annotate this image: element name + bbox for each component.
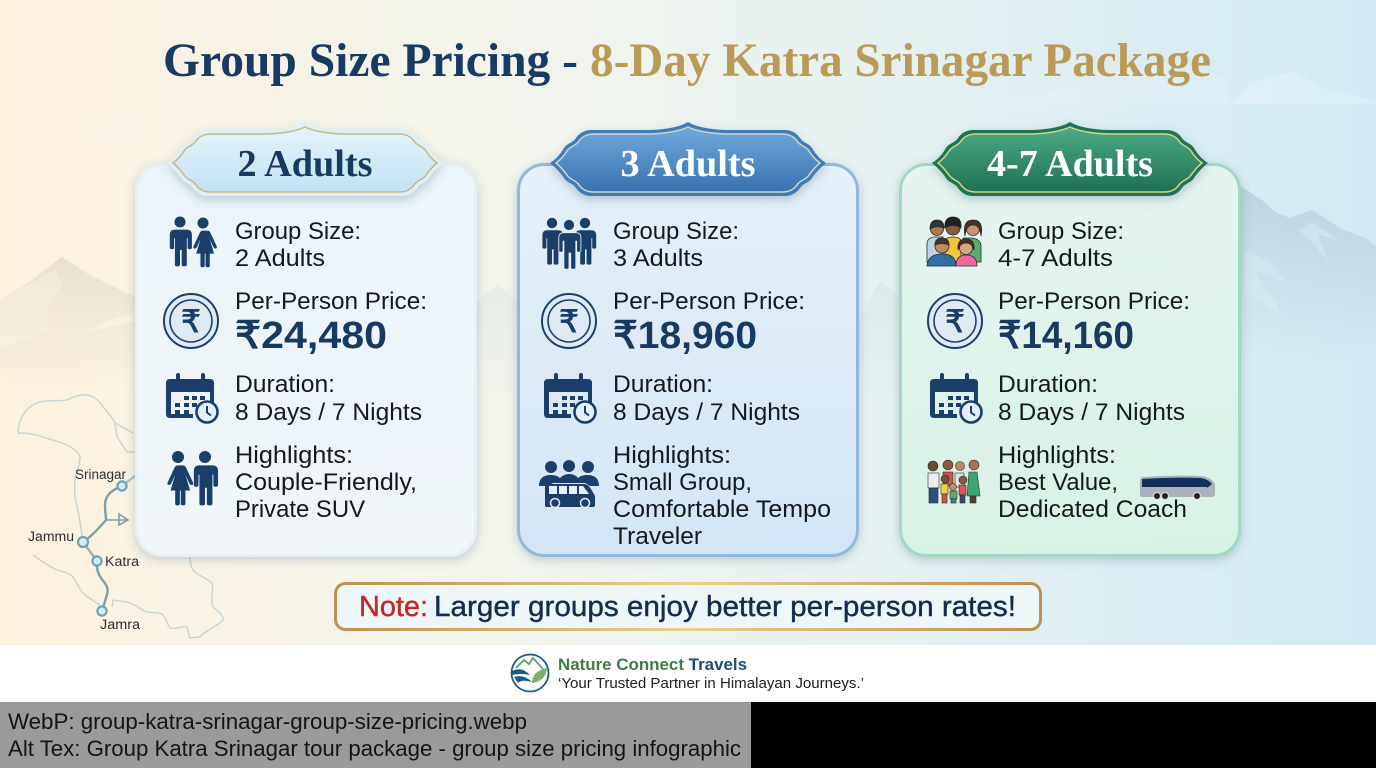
group size text (613, 218, 739, 272)
group size text (998, 218, 1124, 272)
group size text: 3 Adults (613, 245, 703, 272)
banner: 2 adults (167, 122, 443, 196)
banner: 4-7 adults: 4-7 Adults (987, 143, 1153, 185)
icon: three adults (542, 218, 596, 269)
icon: coach bus (1140, 476, 1215, 500)
icon: rupee coin (542, 294, 596, 348)
duration (235, 371, 422, 426)
tagline: ‘Your Trusted Partner in Himalayan Journeys.’ (558, 675, 864, 692)
per-person price: Per-Person Price: (998, 288, 1190, 315)
map with route (18, 395, 223, 638)
banner: 3 adults (550, 122, 826, 196)
highlights: Best Value, (998, 469, 1118, 496)
map with route: Katra (105, 554, 140, 569)
icon: couple holding hands (167, 451, 218, 505)
title: 8-Day Katra Srinagar Package (590, 34, 1211, 87)
highlights: Comfortable Tempo (613, 496, 831, 523)
per-person price: ₹18,960 (613, 315, 757, 357)
highlights (998, 442, 1187, 523)
highlights (613, 442, 831, 550)
per-person price: Per-Person Price: (235, 288, 427, 315)
icon: calendar (166, 373, 218, 422)
highlights: Private SUV (235, 496, 366, 523)
icon: rupee coin (164, 294, 218, 348)
brand name: Nature Connect Travels (558, 656, 747, 674)
icon: family (928, 460, 980, 503)
icon: calendar (930, 373, 982, 422)
highlights: Small Group, (613, 469, 752, 496)
duration: 8 Days / 7 Nights (613, 399, 800, 426)
highlights (235, 442, 417, 523)
per-person price (235, 288, 427, 357)
panel: 3 adults (518, 122, 858, 556)
group size text: Group Size: (235, 218, 361, 245)
per-person price (998, 288, 1190, 357)
icon: couple (170, 216, 217, 267)
duration: Duration: (613, 371, 713, 398)
highlights: Couple-Friendly, (235, 469, 417, 496)
per-person price: Per-Person Price: (613, 288, 805, 315)
duration (613, 371, 800, 426)
group size text: Group Size: (998, 218, 1124, 245)
group size text (235, 218, 361, 272)
banner: 3 adults: 3 Adults (620, 143, 756, 185)
metadata bar: Alt Tex: Group Katra Srinagar tour package - group size pricing infographic (8, 736, 741, 761)
footer bar (0, 645, 1376, 702)
group size text: 4-7 Adults (998, 245, 1113, 272)
banner: 2 adults: 2 Adults (238, 143, 372, 185)
highlights: Dedicated Coach (998, 496, 1187, 523)
per-person price (613, 288, 805, 357)
duration: 8 Days / 7 Nights (235, 399, 422, 426)
duration: 8 Days / 7 Nights (998, 399, 1185, 426)
icon: group and van (539, 460, 599, 508)
title: Group Size Pricing - (163, 34, 578, 87)
per-person price: ₹14,160 (998, 315, 1134, 357)
callout: note: Larger groups enjoy better per-person rates! (434, 591, 1016, 623)
callout: note (336, 584, 1040, 630)
metadata bar (0, 702, 1376, 768)
highlights: Traveler (613, 523, 702, 550)
title (163, 34, 1211, 87)
logo (512, 654, 548, 692)
panel: 4-7 adults (900, 122, 1240, 556)
highlights: Highlights: (998, 442, 1116, 469)
highlights: Highlights: (613, 442, 731, 469)
banner: 4-7 adults (932, 122, 1208, 196)
metadata bar: WebP: group-katra-srinagar-group-size-pricing.webp (8, 709, 527, 734)
icon: family group (927, 217, 982, 266)
callout: note: Note: (359, 591, 428, 623)
icon: calendar (544, 373, 596, 422)
icon: rupee coin (928, 294, 982, 348)
group size text: Group Size: (613, 218, 739, 245)
map with route: Jammu (28, 529, 74, 544)
highlights: Highlights: (235, 442, 353, 469)
map with route: Srinagar (75, 467, 126, 482)
duration (998, 371, 1185, 426)
duration: Duration: (998, 371, 1098, 398)
panel: 2 adults (136, 122, 476, 556)
per-person price: ₹24,480 (235, 315, 387, 357)
group size text: 2 Adults (235, 245, 325, 272)
map with route: Jamra (100, 617, 141, 632)
duration: Duration: (235, 371, 335, 398)
